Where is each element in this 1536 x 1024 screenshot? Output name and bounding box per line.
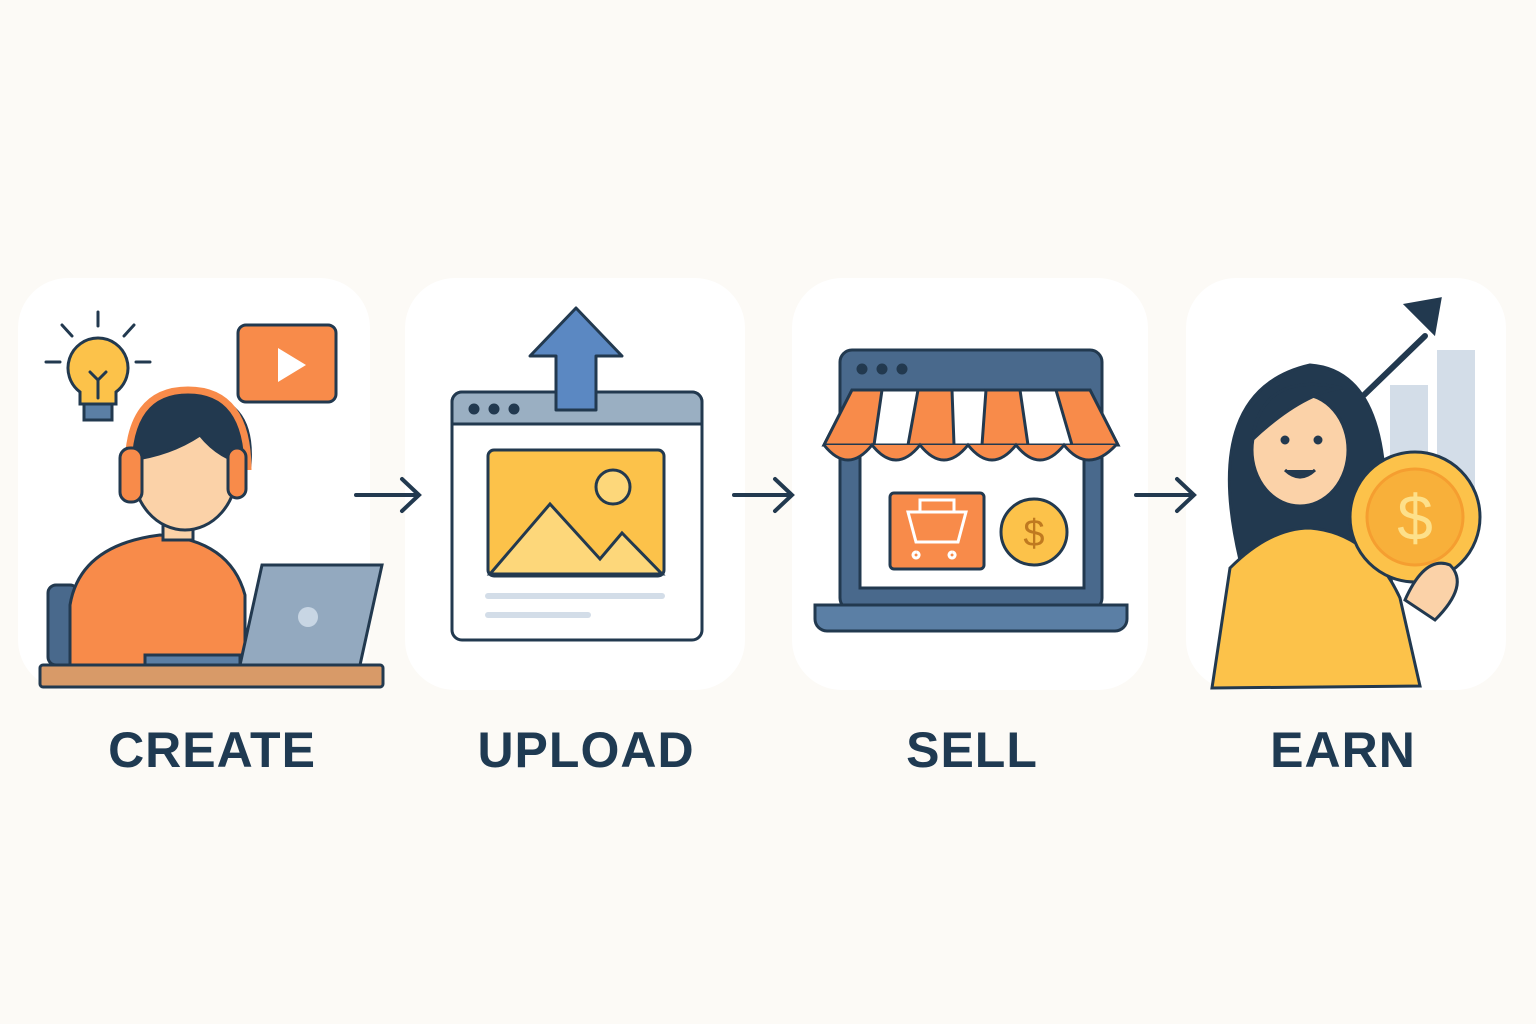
- panel: upload: [405, 278, 745, 690]
- arrow 2: [734, 479, 792, 511]
- chart: growth bars: [1390, 350, 1475, 545]
- illustration: woman with coin: $: [1397, 482, 1433, 554]
- panel: earn: [1186, 278, 1506, 690]
- label: upload: UPLOAD: [477, 722, 695, 778]
- arrow 1: [356, 479, 419, 511]
- icon: browser window with image: [452, 392, 702, 640]
- label: sell: SELL: [906, 722, 1038, 778]
- icon: laptop store: [815, 350, 1127, 631]
- icon: laptop store: $: [1023, 513, 1045, 555]
- illustration: woman with coin: [1212, 365, 1480, 688]
- arrow 3: [1136, 479, 1194, 511]
- illustration: person at laptop: [40, 390, 383, 687]
- icon: light bulb: [46, 312, 150, 420]
- label: create: CREATE: [108, 722, 316, 778]
- icon: upload arrow: [530, 308, 622, 410]
- panel: sell: [792, 278, 1148, 690]
- panel: create: [18, 278, 383, 690]
- icon: video play: [238, 325, 336, 402]
- icon: trend arrow: [1364, 299, 1440, 395]
- label: earn: EARN: [1270, 722, 1416, 778]
